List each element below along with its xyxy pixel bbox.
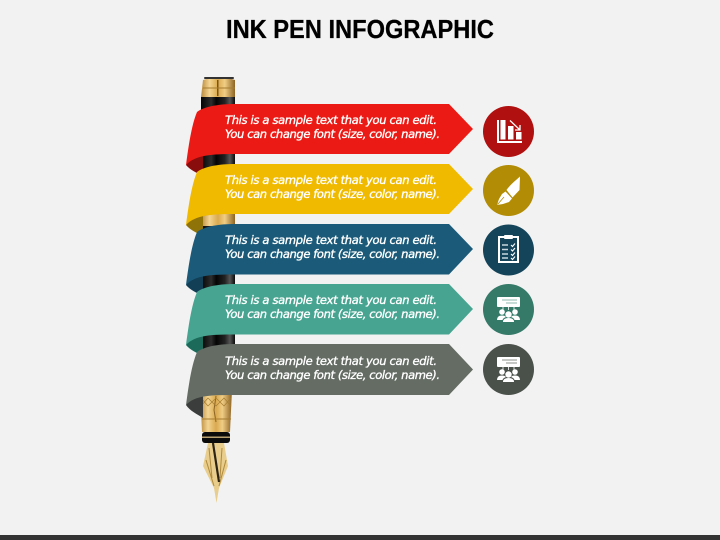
ribbon 1 text: You can change font (size, color, name). [225,127,440,141]
ribbon 2 text: This is a sample text that you can edit. [225,173,437,187]
pen rings [202,432,230,443]
bottom bar [0,535,720,540]
ribbon 5 text [225,354,440,382]
icon: clipboard checklist [483,224,534,276]
ribbon 2 [186,164,473,236]
pen grip [200,390,232,432]
ribbon 5 [186,344,473,418]
pen barrel [201,97,235,215]
ribbon 5 text: This is a sample text that you can edit. [225,354,437,368]
ribbon 3 text: This is a sample text that you can edit. [225,233,437,247]
ribbon 3 [186,224,473,296]
pen cap top [201,77,235,97]
ribbon 1 text [225,113,440,141]
ribbon 5 text: You can change font (size, color, name). [225,368,440,382]
ribbon 2 text: You can change font (size, color, name). [225,187,440,201]
ribbon 4 text [225,293,440,321]
ribbon 3 text: You can change font (size, color, name). [225,247,440,261]
icon: team meeting [483,284,534,335]
ribbon 1 [186,104,473,176]
lower barrel [201,226,235,358]
fountain pen [200,77,235,503]
gold band [201,214,235,226]
ribbon 2 text [225,173,440,201]
ribbon 4 text: You can change font (size, color, name). [225,307,440,321]
icon: team presentation [483,344,534,395]
pen nib [203,443,228,503]
ribbon 3 text [225,233,440,261]
title: INK PEN INFOGRAPHIC [226,14,494,44]
ribbon 1 text: This is a sample text that you can edit. [225,113,437,127]
ribbon 4 text: This is a sample text that you can edit. [225,293,437,307]
ribbon 4 [186,284,473,356]
icon: pen nib [483,165,534,216]
icon: bar chart [483,106,534,157]
